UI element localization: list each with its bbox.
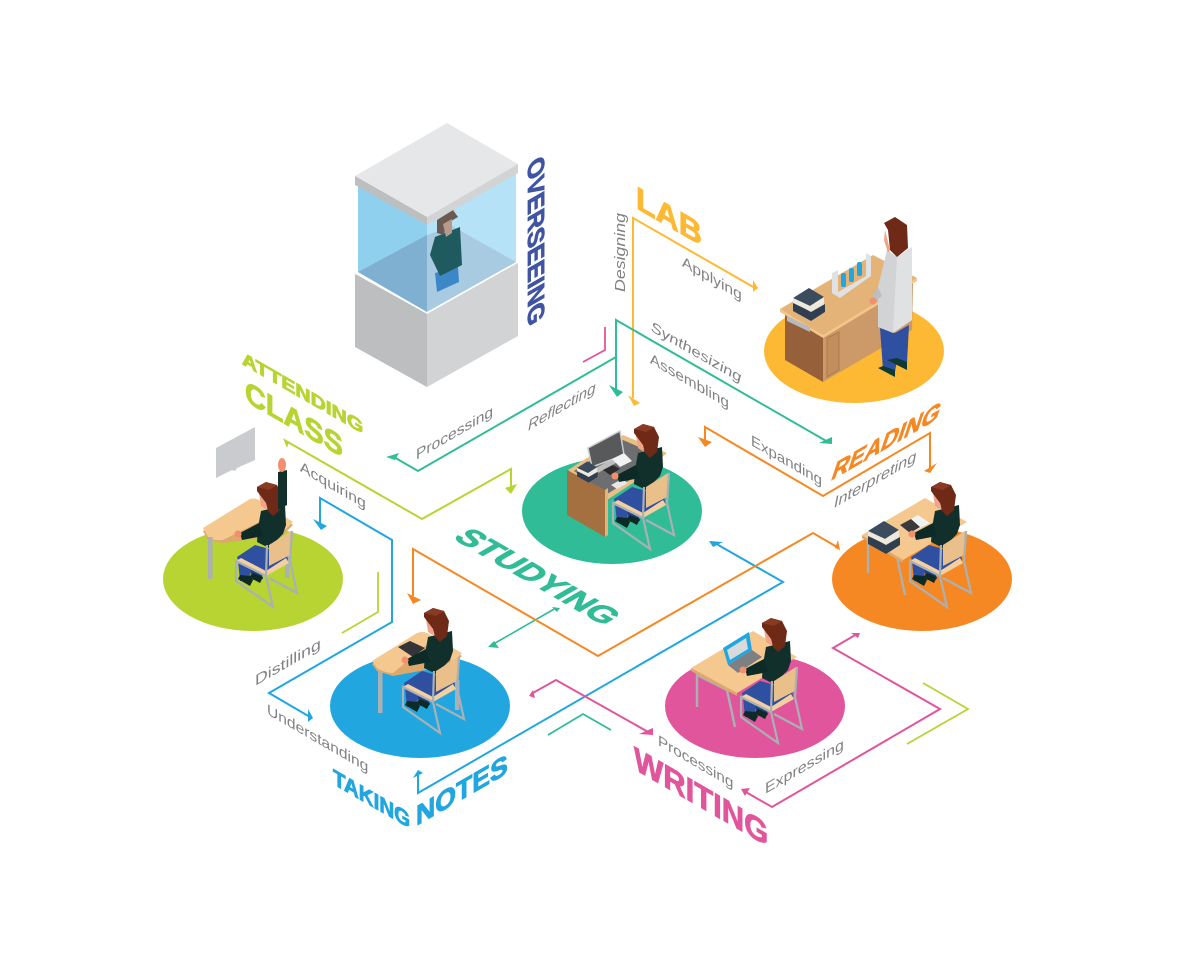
disc: studying xyxy=(522,458,702,564)
figure: taking notes xyxy=(372,608,464,733)
label: interpreting: Interpreting xyxy=(834,447,917,512)
disc: writing xyxy=(665,654,845,758)
heading: attending: ATTENDING xyxy=(242,348,363,438)
heading: class: CLASS xyxy=(245,375,343,465)
label: designing: Designing xyxy=(612,212,629,292)
figure: attending class xyxy=(203,427,297,607)
arrows: reading orange xyxy=(407,427,937,656)
label: processing green: Processing xyxy=(416,402,493,464)
heading: writing: WRITING xyxy=(634,739,768,854)
arrows: notes blue xyxy=(269,498,783,793)
disc: taking notes xyxy=(330,654,510,758)
arrows: lab yellow xyxy=(628,218,758,406)
disc: reading xyxy=(832,527,1012,631)
arrows: studying green xyxy=(386,320,832,735)
label: expressing: Expressing xyxy=(765,735,844,798)
label: distilling: Distilling xyxy=(255,635,321,690)
figure: lab xyxy=(780,217,917,382)
label: assembling: Assembling xyxy=(650,350,729,413)
figure: studying xyxy=(567,424,674,549)
label: reflecting: Reflecting xyxy=(528,379,596,435)
label: applying: Applying xyxy=(682,253,742,305)
heading: notes: NOTES xyxy=(416,748,508,832)
arrows: attending lime xyxy=(283,438,968,744)
label: expanding: Expanding xyxy=(751,432,822,490)
label: acquiring: Acquiring xyxy=(300,458,366,513)
figure: writing xyxy=(691,618,802,743)
heading: lab: LAB xyxy=(636,179,702,253)
icon: projector screen xyxy=(216,427,255,478)
label: understanding: Understanding xyxy=(267,701,368,777)
label: processing pink: Processing xyxy=(658,732,733,793)
heading: overseeing: OVERSEEING xyxy=(523,151,549,331)
heading: reading: READING xyxy=(828,396,945,487)
label: synthesizing: Synthesizing xyxy=(651,318,742,387)
heading: taking: TAKING xyxy=(333,764,410,834)
arrows: writing pink xyxy=(529,327,940,807)
panel: overseeing booth xyxy=(355,123,518,387)
disc: lab xyxy=(764,299,944,403)
figure: reading xyxy=(862,482,971,607)
heading: studying: STUDYING xyxy=(446,523,630,630)
disc: attending class xyxy=(163,527,343,631)
